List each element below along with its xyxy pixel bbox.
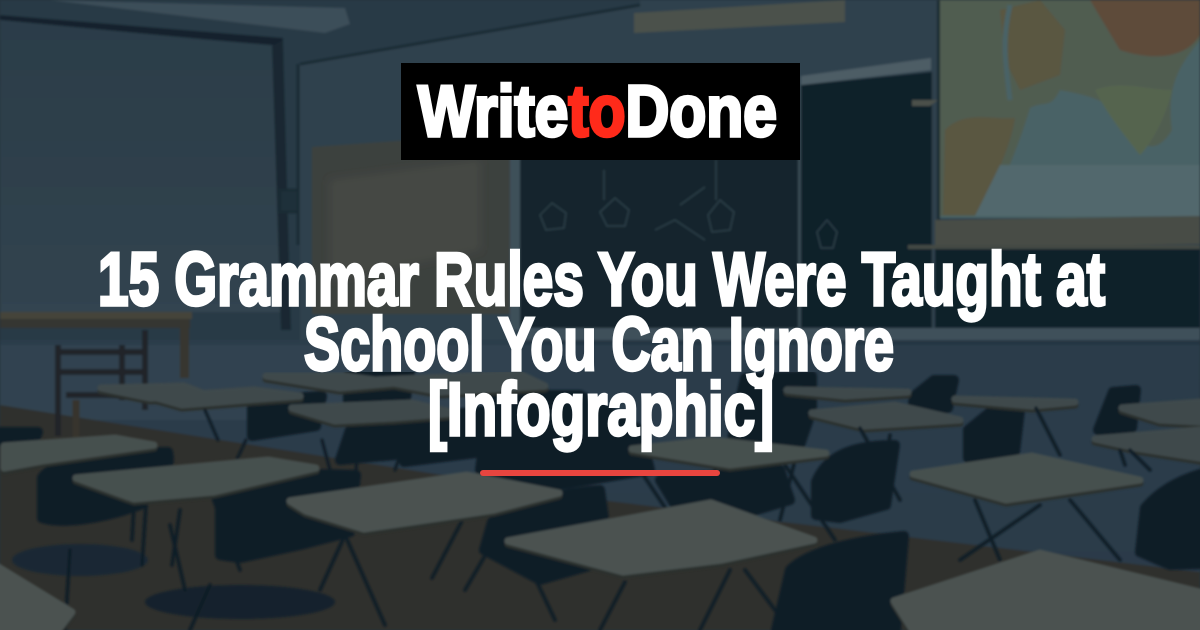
front chairs: [776, 536, 904, 630]
middle row chairs and legs: [42, 445, 1200, 580]
logo background: [401, 63, 800, 160]
logo wordmark: WritetoDone: [418, 72, 777, 152]
title: [Infographic]: [428, 367, 774, 451]
title: School You Can Ignore: [304, 302, 894, 386]
logo: [401, 63, 800, 160]
desks and chairs: [0, 372, 1200, 630]
middle row desks: [4, 438, 1140, 500]
title: [98, 237, 1105, 451]
back row desks: [101, 374, 1200, 458]
back row chairs: [0, 372, 1136, 485]
red divider: [480, 470, 720, 476]
front desks: [0, 475, 1200, 630]
